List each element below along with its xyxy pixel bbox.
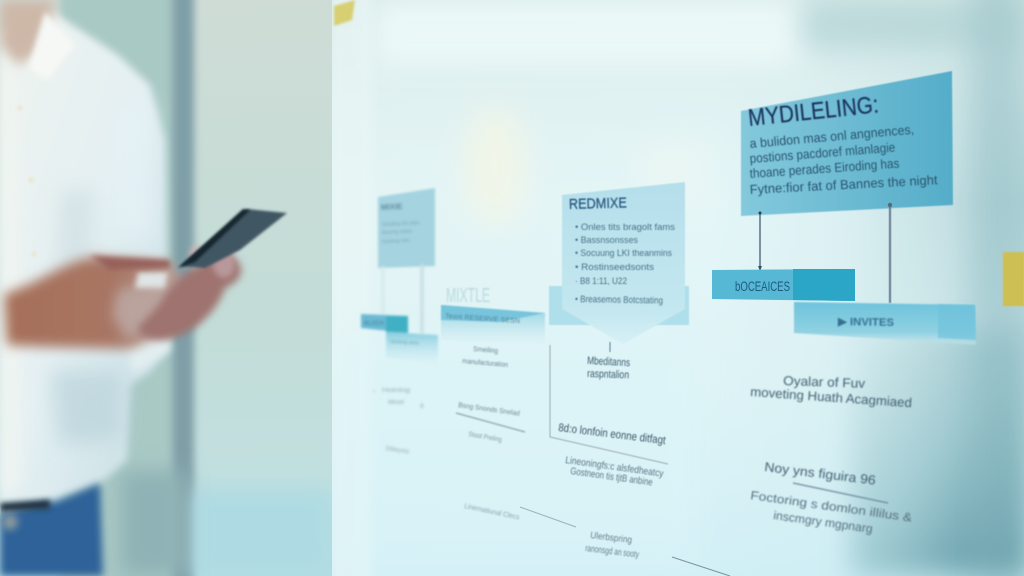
- right text: figures: Noy yns figuira 96: [764, 459, 877, 488]
- fingers: [139, 255, 241, 340]
- lower connectors and text: ranonsgd an sooty: [585, 543, 640, 561]
- right text: Oyalar of Fuv: moveting Huath Acagmiaed: [750, 384, 912, 410]
- glass board: [332, 0, 1024, 576]
- shirt: [0, 10, 168, 512]
- main panel: MYDILELING: postions pacdoref mlanlagie: [749, 140, 896, 166]
- right text: Oyalar of Fuv: [750, 373, 912, 410]
- left lower column text: [456, 402, 525, 444]
- main panel: MYDILELING: Fytne:fior fat of Bannes the night: [749, 172, 938, 197]
- lower connectors and text: [464, 503, 730, 576]
- second column blue box: [441, 305, 545, 345]
- far left lower text: ○: [372, 388, 376, 395]
- far left lower text: Hoining: [382, 387, 410, 394]
- right text: figures: inscmgry mgpnarg: [773, 508, 874, 536]
- first blue box: DOCEACES: bOCEAICES: [735, 279, 790, 294]
- far left small box: [361, 314, 438, 365]
- far left panel: [378, 188, 435, 334]
- left lower column text: Bsng Snonds Snelad: [458, 402, 520, 418]
- center lower text: Gostneon tis tjtB anbine: [570, 466, 654, 489]
- second column text: manufacturation: [462, 358, 508, 369]
- second column text: [462, 346, 508, 369]
- neck: [0, 0, 55, 65]
- far left lower text: 8: [420, 403, 424, 410]
- far left panel: sharing notes: [382, 228, 413, 236]
- center connector and text: raspntalion: [587, 368, 629, 381]
- background: room behind the glass: [0, 0, 340, 576]
- second column text: Smeiling: [473, 346, 498, 355]
- left lower column text: Stoot Preling: [468, 431, 502, 444]
- yellow sticky note: top: [334, 0, 355, 26]
- right text: figures: [750, 459, 913, 536]
- center lower text: 8d:o lonfoin eonne ditfagt: [558, 422, 667, 447]
- center panel: REDMIXE: • Bassnsonsses: [575, 235, 638, 246]
- center connector and text: Mbeditanns: [587, 355, 631, 369]
- first blue box: DOCEACES: [712, 269, 855, 301]
- far left lower text: Misel: [388, 399, 405, 406]
- far left panel: tracking rate: [382, 238, 410, 245]
- forearm and hand: [4, 257, 185, 349]
- jeans: [0, 483, 103, 576]
- far left small box: sensing area: [390, 339, 419, 347]
- shirt buttons: [17, 105, 37, 257]
- main panel: MYDILELING: [741, 71, 953, 216]
- yellow sticky note: right: [1003, 252, 1024, 306]
- far left lower text: Stleyss: [385, 445, 410, 455]
- divider frame: [550, 345, 668, 464]
- center panel: REDMIXE: • Socuung LKI theanmins: [575, 248, 672, 259]
- right text: figures: Foctoring s domlon illilus &: [750, 488, 913, 525]
- center panel: REDMIXE: • Rostinseedsonts: [575, 262, 654, 273]
- lower connectors and text: Ulerbspring: [590, 530, 633, 546]
- right text: Oyalar of Fuv: Oyalar of Fuv: [783, 373, 866, 391]
- main panel: MYDILELING: MYDILELING:: [747, 91, 880, 132]
- center connector and text: [587, 342, 631, 381]
- far left panel: MIXIE: [381, 202, 404, 212]
- second blue box: INVITES: ▶ INVITES: [837, 316, 894, 329]
- center panel: REDMIXE: [549, 182, 689, 344]
- center panel: REDMIXE: · B8 1:11, U22: [575, 276, 627, 287]
- main panel: MYDILELING: a bulidon mas onl angnences,: [749, 122, 915, 151]
- center panel: REDMIXE: • Breasemos Botcstating: [575, 294, 663, 307]
- main panel: MYDILELING: thoane perades Eiroding has: [749, 156, 900, 181]
- arrows from main panel: [758, 203, 892, 303]
- person holding phone: [0, 0, 287, 576]
- center lower text: [558, 422, 667, 489]
- center panel: REDMIXE: • Onles tits bragolt fams: [575, 222, 675, 233]
- center panel: REDMIXE: REDMIXE: [569, 194, 627, 213]
- second blue box: INVITES: [794, 302, 976, 345]
- lower connectors and text: Linernatiunal Clecs: [464, 503, 520, 522]
- second column blue box: Tesnt RESERVE SESN: [445, 313, 520, 325]
- far left small box: BLOCK: [364, 321, 384, 327]
- far left panel: Snuding the plan: [382, 220, 420, 228]
- center lower text: Lineoningfs:c alsfedheatcy: [565, 455, 664, 480]
- heading: second column: MIXTLE: [446, 285, 490, 307]
- phone: [180, 209, 287, 268]
- far left lower text: [372, 387, 424, 455]
